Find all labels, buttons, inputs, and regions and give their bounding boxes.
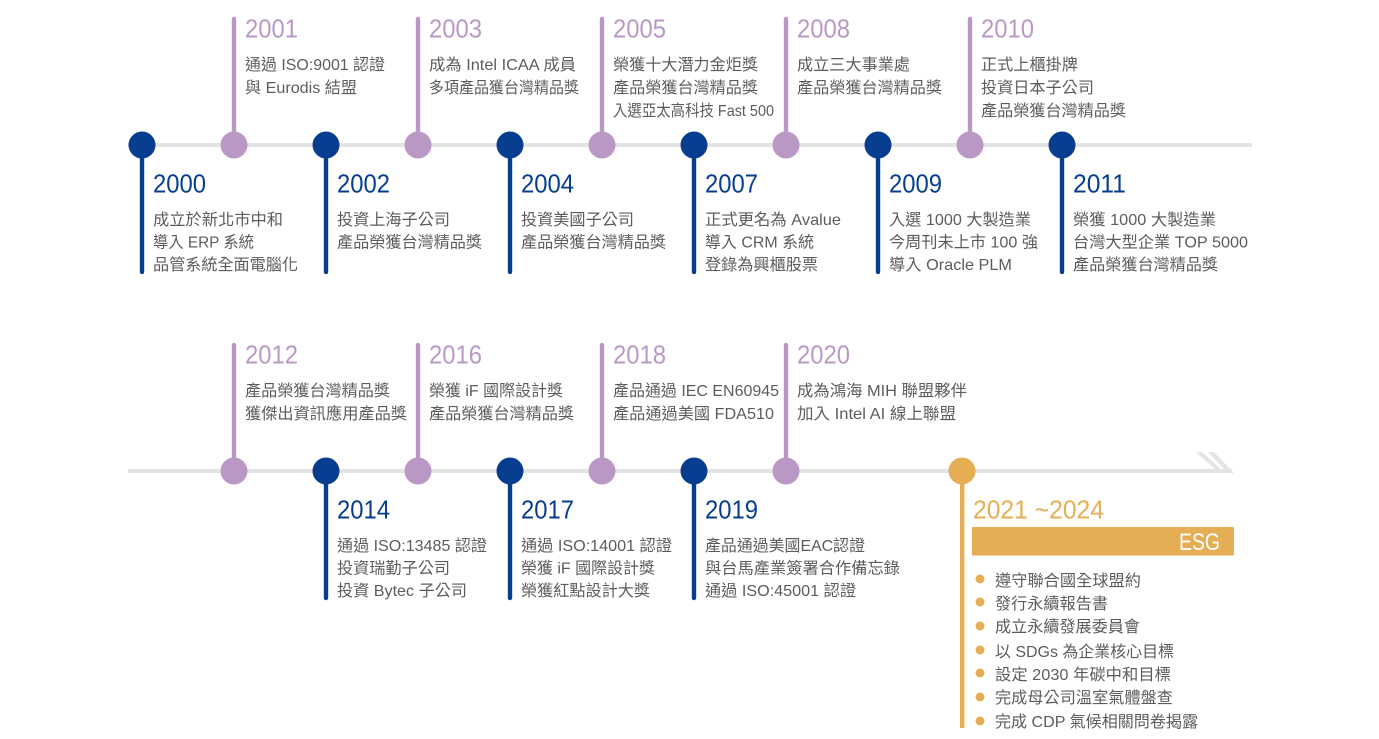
milestone 2004: 產品榮獲台灣精品獎 [521,234,666,252]
milestone 2010: 2010 [981,14,1034,44]
ESG bullet list: 成立永續發展委員會 [995,618,1140,636]
milestone 2010 [956,14,1126,158]
milestone 2001: 與 Eurodis 結盟 [245,79,357,97]
milestone 2018 [588,340,779,484]
milestone 2000: 導入 ERP 系統 [153,232,254,252]
milestone 2009: 今周刊未上市 100 強 [889,234,1038,252]
milestone 2005: 入選亞太高科技 Fast 500 [613,102,774,120]
ESG bullet list: 發行永續報告書 [995,595,1108,613]
milestone 2016 [404,340,574,484]
milestone 2012: 產品榮獲台灣精品獎 [245,382,390,400]
milestone 2009: 入選 1000 大製造業 [889,211,1031,229]
milestone 2012 [220,340,407,484]
ESG bullet list: 完成 CDP 氣候相關問卷揭露 [995,713,1198,731]
milestone 2016: 產品榮獲台灣精品獎 [429,405,574,423]
milestone 2007: 導入 CRM 系統 [705,232,814,252]
milestone 2000 [128,132,298,274]
milestone 2020: 成為鴻海 MIH 聯盟夥伴 [797,382,967,400]
milestone 2009: 導入 Oracle PLM [889,255,1012,274]
ESG bullet list: 以 SDGs 為企業核心目標 [995,643,1174,661]
axis: second row with arrow end [128,452,1234,473]
milestone 2000: 品管系統全面電腦化 [153,255,298,274]
milestone 2005 [588,14,774,158]
milestone 2018: 產品通過 IEC EN60945 [613,382,779,400]
milestone 2009: 2009 [889,168,942,198]
milestone 2017 [496,458,672,600]
milestone 2004 [496,132,666,272]
milestone 2008: 2008 [797,14,850,44]
milestone 2018: 2018 [613,340,666,370]
milestone 2007: 正式更名為 Avalue [705,211,841,229]
milestone 2001 [220,14,385,158]
milestone 2011 [1048,132,1248,274]
milestone 2017: 通過 ISO:14001 認證 [521,537,672,555]
axis: first row [128,143,1252,147]
milestone 2011: 榮獲 1000 大製造業 [1073,211,1216,229]
ESG bullet list [976,571,1198,731]
milestone 2011: 產品榮獲台灣精品獎 [1073,256,1218,274]
milestone 2011: 2011 [1073,168,1126,198]
milestone 2003: 成為 Intel ICAA 成員 [429,56,576,74]
milestone 2016: 榮獲 iF 國際設計獎 [429,382,563,400]
year range heading: 2021 ~2024 [973,494,1104,524]
milestone 2007 [680,132,841,274]
milestone 2008: 成立三大事業處 [797,56,910,74]
milestone 2003: 多項產品獲台灣精品獎 [429,79,579,97]
milestone 2020: 加入 Intel AI 線上聯盟 [797,405,956,423]
milestone 2016: 2016 [429,340,482,370]
ESG bullet list: 遵守聯合國全球盟約 [995,571,1141,590]
ESG banner [972,527,1234,556]
milestone 2008 [772,14,942,158]
milestone 2010: 正式上櫃掛牌 [981,56,1078,74]
milestone 2014: 投資瑞勤子公司 [337,560,450,578]
milestone 2017: 榮獲 iF 國際設計獎 [521,560,655,578]
ESG bullet list: 完成母公司溫室氣體盤查 [995,689,1173,707]
milestone 2003 [404,14,579,158]
milestone 2017: 2017 [521,494,574,524]
milestone 2014: 2014 [337,494,390,524]
milestone 2007: 登錄為興櫃股票 [705,256,818,274]
milestone 2007: 2007 [705,168,758,198]
milestone 2019: 與台馬產業簽署合作備忘錄 [705,560,900,578]
milestone 2017: 榮獲紅點設計大獎 [521,582,650,600]
milestone 2002: 產品榮獲台灣精品獎 [337,234,482,252]
milestone 2021-2024 ESG panel [948,458,1234,731]
milestone 2002: 投資上海子公司 [337,211,450,229]
milestone 2019: 產品通過美國EAC認證 [705,537,865,555]
milestone 2002 [312,132,482,272]
milestone 2001: 通過 ISO:9001 認證 [245,56,385,74]
milestone 2020: 2020 [797,340,850,370]
milestone 2002: 2002 [337,168,390,198]
milestone 2004: 投資美國子公司 [521,211,634,229]
ESG banner: ESG [1179,529,1220,556]
milestone 2001: 2001 [245,14,298,44]
milestone 2020 [772,340,967,484]
milestone 2014: 投資 Bytec 子公司 [337,582,467,600]
milestone 2014 [312,458,487,600]
milestone 2010: 投資日本子公司 [981,79,1094,97]
milestone 2000: 成立於新北市中和 [153,211,283,229]
milestone 2018: 產品通過美國 FDA510 [613,405,774,423]
milestone 2005: 產品榮獲台灣精品獎 [613,79,758,97]
milestone 2005: 2005 [613,14,666,44]
milestone 2019 [680,458,900,600]
ESG bullet list: 設定 2030 年碳中和目標 [995,666,1171,684]
milestone 2011: 台灣大型企業 TOP 5000 [1073,234,1248,252]
milestone 2003: 2003 [429,14,482,44]
milestone 2008: 產品榮獲台灣精品獎 [797,79,942,97]
milestone 2019: 2019 [705,494,758,524]
milestone 2000: 2000 [153,168,206,198]
milestone 2012: 2012 [245,340,298,370]
milestone 2010: 產品榮獲台灣精品獎 [981,102,1126,120]
milestone 2019: 通過 ISO:45001 認證 [705,582,856,600]
milestone 2012: 獲傑出資訊應用產品獎 [245,404,407,423]
milestone 2014: 通過 ISO:13485 認證 [337,537,487,555]
milestone 2005: 榮獲十大潛力金炬獎 [613,56,758,74]
milestone 2004: 2004 [521,168,574,198]
milestone 2009 [864,132,1038,274]
